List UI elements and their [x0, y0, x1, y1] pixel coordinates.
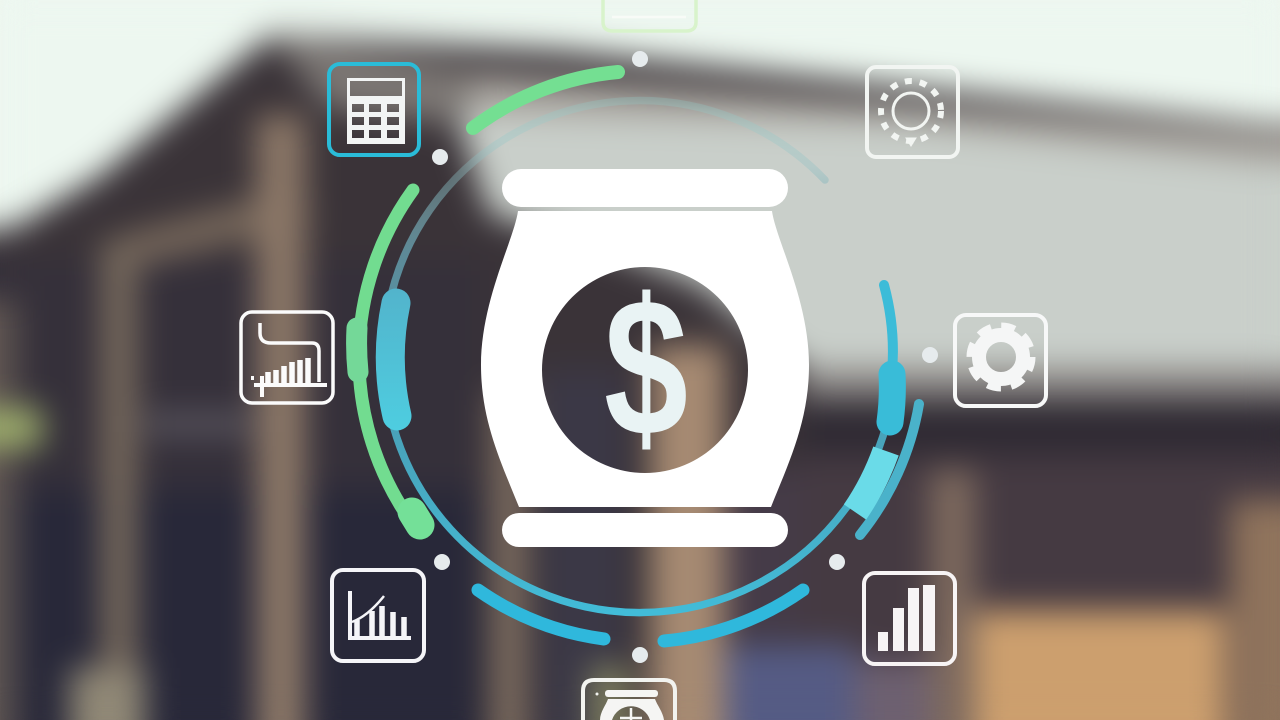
green arc: left thick section: [357, 328, 358, 372]
icon: calculator: [329, 64, 419, 155]
blue arc: bottom right: [664, 590, 803, 641]
green arc: left: [359, 190, 413, 520]
dollar sign: $: [604, 259, 688, 478]
green arc: bottom thick end: [412, 512, 420, 525]
icon: gear outline: [867, 67, 958, 157]
blue arc: left thick: [390, 303, 397, 416]
green arc: top: [473, 72, 618, 128]
icon: solid gear: [955, 315, 1046, 406]
blue arc: right outer: [860, 404, 919, 535]
inner ring arc: [384, 101, 890, 613]
jar body with round window: [481, 211, 809, 507]
blue arc: right thick lower: [855, 451, 886, 512]
blue arc: right thin: [884, 285, 893, 390]
jar lid: [502, 169, 788, 207]
icon: bar chart: [864, 573, 955, 664]
jar base: [502, 513, 788, 547]
icon: graph with curve: [241, 312, 333, 403]
circular arc ring: [357, 72, 919, 641]
icon: top box, cropped: [603, 0, 696, 31]
central money jar: [481, 169, 809, 547]
blue arc: right thick upper: [890, 374, 892, 422]
icon: mini jar box, cropped at bottom: [583, 680, 675, 720]
icon: line chart with bars: [332, 570, 424, 661]
blue arc: bottom left: [478, 590, 604, 639]
connector dots: [432, 51, 938, 663]
